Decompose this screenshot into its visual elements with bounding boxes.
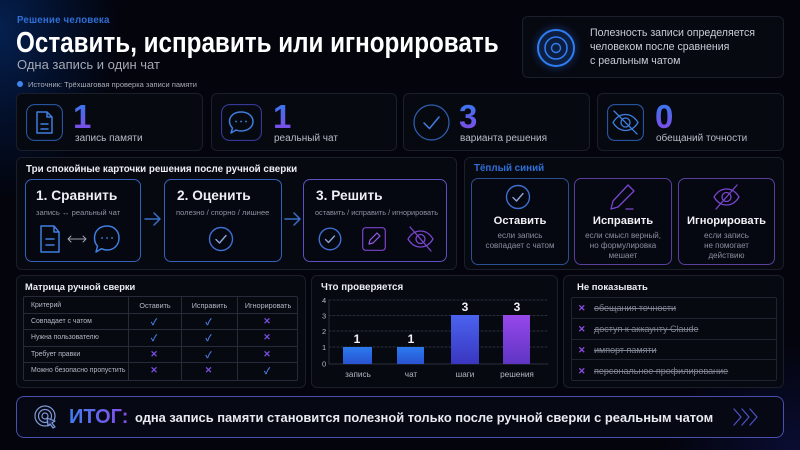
label: ИТОГ:: [69, 406, 128, 428]
card: evaluate: [164, 179, 282, 262]
eyebrow: Решение человека: [17, 15, 110, 26]
icon: check circle: [413, 104, 450, 141]
table: ✕: [263, 332, 271, 342]
bar chart: 3: [462, 300, 469, 314]
list: импорт памяти: [594, 345, 657, 355]
bar chart: чат: [405, 370, 417, 379]
value: 1: [73, 98, 91, 135]
panel: decision steps: [16, 157, 457, 270]
stat: accuracy promises: [597, 93, 784, 151]
table: ✕: [205, 365, 212, 375]
table: Оставить: [139, 301, 171, 310]
icon: check: [506, 184, 530, 210]
card text: мешает: [609, 251, 637, 260]
arrow: [144, 212, 161, 226]
table: Требует правки: [31, 351, 80, 358]
icon: document to chat: [40, 225, 120, 253]
callout text: человеком после сравнения: [590, 41, 729, 53]
list: персональное профилирование: [594, 366, 728, 376]
table: Критерий: [31, 302, 61, 309]
subtitle: Одна запись и один чат: [17, 57, 160, 72]
stat: real chat: [211, 93, 397, 151]
card title: 1. Сравнить: [36, 188, 117, 203]
icon: crossed eye: [407, 226, 434, 252]
card subtitle: оставить / исправить / игнорировать: [315, 208, 438, 217]
table: [23, 296, 298, 381]
card: keep: [471, 178, 569, 265]
table: ✓: [205, 350, 212, 360]
card title: Игнорировать: [687, 215, 766, 227]
heading: Тёплый синий: [474, 163, 544, 174]
card text: [704, 231, 749, 260]
card subtitle: полезно / спорно / лишнее: [176, 208, 269, 217]
source note: Источник: Трёхшаговая проверка записи памяти: [28, 80, 197, 89]
bar chart: 0: [322, 360, 326, 368]
heading: Не показывать: [577, 282, 648, 293]
card: fix: [574, 178, 672, 265]
callout text: [590, 27, 755, 67]
list: ✕: [578, 366, 586, 376]
card: decide: [303, 179, 447, 262]
icon: document: [26, 104, 63, 141]
icon: check: [208, 226, 234, 252]
card text: действию: [709, 251, 744, 260]
icon: target cursor: [34, 405, 56, 429]
bar chart: 1: [354, 332, 361, 346]
bar chart: решения: [500, 370, 534, 379]
bar chart: шаги: [456, 370, 474, 379]
title: Оставить, исправить или игнорировать: [16, 27, 499, 59]
table: ✓: [151, 317, 157, 327]
heading: Матрица ручной сверки: [25, 282, 135, 292]
stat: memory record: [16, 93, 203, 151]
table: ✕: [263, 349, 271, 359]
card text: [585, 231, 661, 260]
table: ✕: [150, 349, 158, 359]
value: 3: [459, 98, 477, 135]
icon: chat: [221, 104, 262, 141]
list: ✕: [578, 324, 586, 334]
list: доступ к аккаунту Claude: [594, 324, 698, 334]
banner: summary: [16, 396, 784, 438]
list: [571, 297, 777, 381]
card title: 3. Решить: [316, 188, 383, 203]
bar chart: 3: [322, 312, 326, 320]
icon: check: [318, 228, 342, 250]
table: Нужна пользователю: [31, 334, 99, 341]
panel: warm blue actions: [464, 157, 784, 270]
list: ✕: [578, 303, 586, 313]
label: запись памяти: [75, 133, 143, 144]
card title: Исправить: [593, 215, 653, 227]
card text: но формулировка: [590, 241, 656, 250]
card title: Оставить: [494, 215, 546, 227]
stat: decision options: [403, 93, 590, 151]
table: Можно безопасно пропустить: [31, 367, 125, 374]
list: обещания точности: [594, 303, 676, 313]
icon: crossed eye: [607, 104, 644, 141]
card text: не помогает: [704, 241, 749, 250]
heading: Три спокойные карточки решения после ручной сверки: [26, 164, 297, 175]
table: ✕: [150, 365, 158, 375]
icon: pencil: [610, 184, 635, 210]
card text: [486, 231, 554, 250]
card text: если запись: [498, 231, 542, 240]
panel: chart: [311, 275, 558, 388]
callout panel: [522, 16, 784, 78]
card: compare: [25, 179, 141, 262]
heading: Что проверяется: [321, 282, 403, 293]
arrow: [284, 212, 301, 226]
value: 0: [655, 98, 673, 135]
label: обещаний точности: [656, 133, 747, 144]
bar chart: 1: [322, 343, 326, 352]
value: 1: [273, 98, 291, 135]
card text: если смысл верный,: [585, 231, 661, 240]
table: Исправить: [192, 301, 227, 310]
callout text: Полезность записи определяется: [590, 27, 755, 39]
panel: matrix: [16, 275, 306, 388]
panel: do not show: [563, 275, 784, 388]
label: варианта решения: [460, 133, 547, 144]
card title: 2. Оценить: [177, 188, 251, 203]
card text: если запись: [704, 231, 749, 240]
bar chart: [322, 296, 548, 379]
bar chart: 1: [408, 332, 415, 346]
card subtitle: запись ↔ реальный чат: [36, 208, 120, 217]
icon: target: [532, 24, 580, 72]
icon: chevrons: [733, 408, 758, 426]
table: ✓: [264, 366, 270, 376]
table: Игнорировать: [245, 301, 291, 310]
table: ✕: [263, 316, 271, 326]
card text: совпадает с чатом: [486, 241, 554, 250]
table: ✓: [151, 333, 157, 343]
table: Совпадает с чатом: [31, 318, 92, 325]
summary text: одна запись памяти становится полезной только после ручной сверки с реальным чатом: [135, 410, 713, 425]
bar chart: запись: [345, 370, 371, 379]
label: реальный чат: [274, 133, 338, 144]
card: ignore: [678, 178, 775, 265]
table: ✓: [205, 333, 212, 343]
table: ✓: [205, 317, 212, 327]
bar chart: 4: [322, 296, 326, 305]
icon: crossed eye: [713, 184, 740, 210]
callout text: с реальным чатом: [590, 55, 680, 67]
bar chart: 2: [322, 327, 326, 336]
bar chart: 3: [514, 300, 521, 314]
icon: pencil: [362, 227, 386, 251]
list: ✕: [578, 345, 586, 355]
